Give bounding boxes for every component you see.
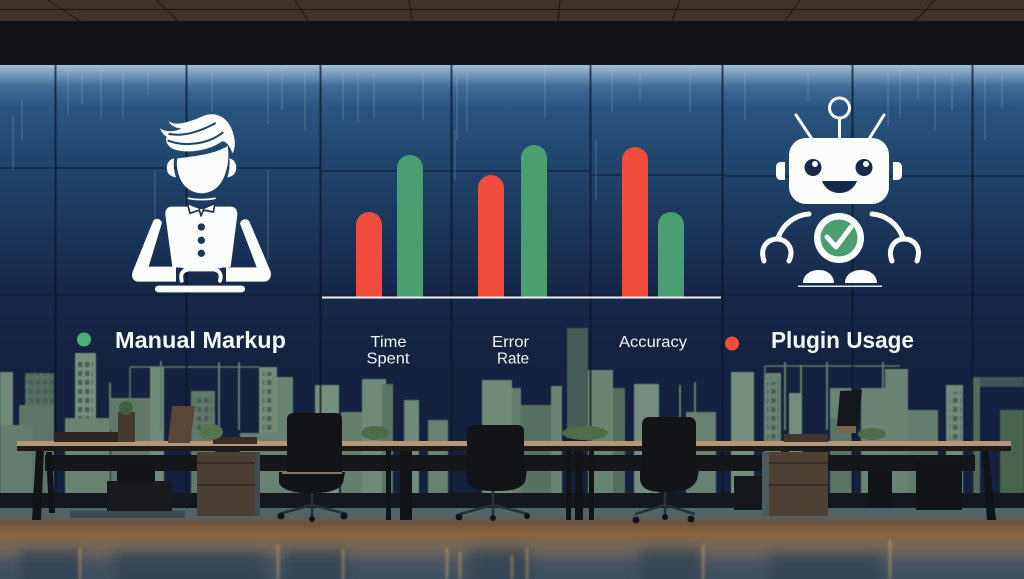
window wall: [0, 65, 1024, 495]
left arm: [132, 219, 176, 282]
metric label: time spent: [366, 334, 410, 368]
left drawer unit: [197, 452, 260, 516]
legend: plugin usage: [725, 327, 914, 353]
mouth: [822, 181, 857, 193]
head: [177, 146, 228, 193]
ears: [167, 158, 236, 177]
floor: [0, 508, 1024, 579]
shadow box under desk: [107, 481, 172, 512]
right drawer unit: [762, 452, 828, 516]
metric label: error rate: Error: [492, 334, 530, 351]
label: Manual Markup: [115, 327, 286, 353]
antennas: [796, 98, 884, 139]
bow tie: [187, 203, 215, 216]
right arm: [226, 219, 271, 282]
bars: accuracy: [622, 147, 648, 297]
hair: [160, 114, 235, 153]
metric label: time spent: Time: [370, 334, 407, 351]
metric label: time spent: Spent: [366, 350, 410, 368]
window mullions: [56, 65, 972, 495]
check badge: [814, 213, 864, 263]
city skyline: [0, 328, 1024, 495]
collar: [188, 198, 215, 200]
hair strand: [168, 123, 223, 144]
torso: [165, 207, 237, 268]
dark header band: [0, 21, 1024, 65]
green dot: [77, 332, 91, 346]
bars: time spent: [356, 212, 382, 297]
floor rail: [0, 493, 1024, 508]
eyes: [804, 159, 872, 176]
table top: [17, 441, 1011, 446]
chair: center: [456, 425, 530, 521]
legs: [32, 450, 996, 520]
robot head: [789, 138, 889, 204]
ears: [776, 162, 902, 180]
arms: [763, 214, 918, 261]
metric label: error rate: Rate: [497, 350, 529, 368]
label: Plugin Usage: [771, 327, 914, 353]
chair: right: [632, 417, 699, 524]
desk items left: [54, 401, 389, 444]
ground line: [798, 286, 882, 287]
desk items right: [562, 390, 886, 442]
buttons: [198, 223, 205, 257]
desk: [17, 441, 1011, 520]
desk bar: [155, 286, 245, 292]
ceiling: [0, 0, 1024, 21]
bars: error rate: [478, 175, 504, 297]
bar chart: [322, 145, 721, 298]
hands: [181, 269, 221, 281]
metric label: accuracy: Accuracy: [619, 334, 687, 351]
chart baseline: [322, 296, 721, 298]
legend: manual markup: [77, 327, 286, 353]
metric label: error rate: [492, 334, 530, 368]
red dot: [725, 336, 739, 350]
back beam: [45, 455, 975, 471]
icon: robot: [763, 98, 918, 287]
feet: [803, 270, 877, 283]
chair: left: [278, 413, 348, 522]
icon: manual worker: [132, 114, 271, 292]
